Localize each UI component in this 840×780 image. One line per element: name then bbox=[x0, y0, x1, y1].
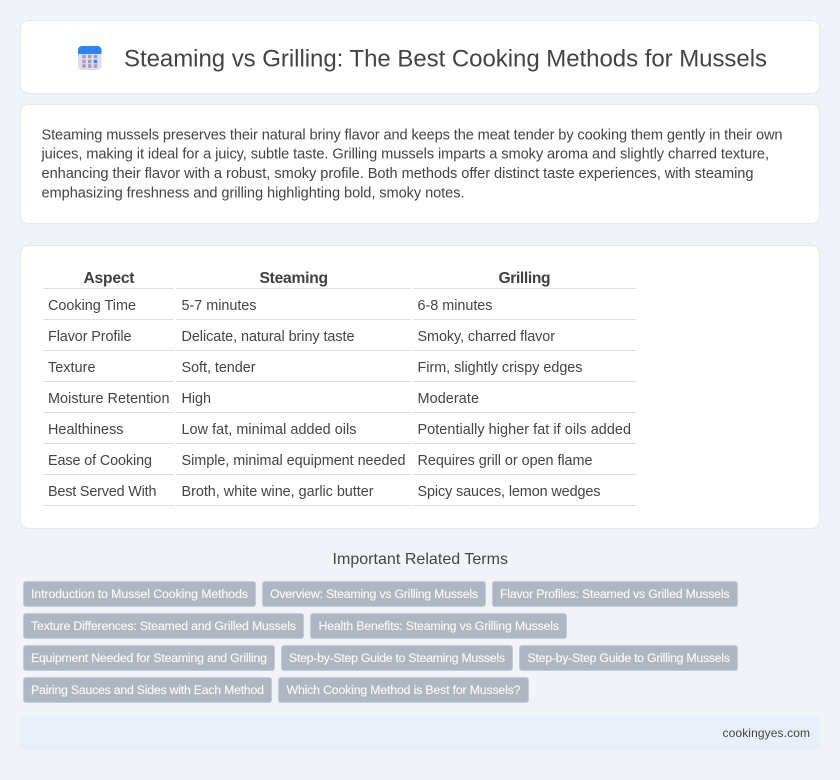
row: best served with: Broth, white wine, garlic butter bbox=[182, 484, 374, 500]
row: best served with: Spicy sauces, lemon wedges bbox=[418, 484, 600, 500]
row: flavor profile: Smoky, charred flavor bbox=[418, 329, 555, 345]
row: moisture retention: Moisture Retention bbox=[48, 391, 170, 407]
row: texture: Soft, tender bbox=[182, 360, 256, 376]
tag: which method bbox=[278, 678, 528, 702]
row: healthiness bbox=[48, 422, 631, 438]
tag: pairing sauces: Pairing Sauces and Sides with Each Method bbox=[31, 683, 264, 697]
tag: equipment: Equipment Needed for Steaming and Grilling bbox=[31, 651, 267, 665]
row: texture bbox=[48, 360, 582, 376]
tag: which method: Which Cooking Method is Best for Mussels? bbox=[286, 683, 521, 697]
tag: introduction bbox=[24, 582, 256, 606]
table header row: Steaming bbox=[260, 270, 328, 287]
footer bbox=[20, 716, 820, 750]
row: best served with: Best Served With bbox=[48, 484, 156, 500]
tag: grilling guide: Step-by-Step Guide to Grilling Mussels bbox=[528, 651, 730, 665]
tag: overview: Overview: Steaming vs Grilling Mussels bbox=[270, 587, 478, 601]
row: moisture retention bbox=[48, 391, 479, 407]
text block: intro paragraph bbox=[40, 128, 782, 202]
row: texture: Firm, slightly crispy edges bbox=[418, 360, 582, 376]
tag: texture differences: Texture Differences: Steamed and Grilled Mussels bbox=[31, 619, 296, 633]
tag: steaming guide: Step-by-Step Guide to Steaming Mussels bbox=[289, 651, 505, 665]
row: flavor profile: Delicate, natural briny taste bbox=[182, 329, 354, 345]
icon: calendar bbox=[78, 46, 102, 70]
tag: steaming guide bbox=[282, 646, 512, 670]
row: cooking time bbox=[48, 298, 492, 314]
footer: cookingyes.com bbox=[722, 726, 810, 740]
title: Steaming vs Grilling: The Best Cooking Methods for Mussels bbox=[124, 46, 767, 72]
row: cooking time: 5-7 minutes bbox=[182, 298, 256, 314]
table header row bbox=[84, 270, 550, 287]
row: flavor profile bbox=[48, 329, 555, 345]
tag: texture differences bbox=[24, 614, 304, 638]
tag: grilling guide bbox=[520, 646, 738, 670]
tag: flavor profiles bbox=[492, 582, 738, 606]
table header row: Aspect bbox=[84, 270, 134, 287]
text block: intro paragraph: Steaming mussels preserves their natural briny flavor and keeps the meat tender by cooking them gently in their own bbox=[42, 128, 782, 144]
row: healthiness: Healthiness bbox=[48, 422, 124, 438]
row: healthiness: Low fat, minimal added oils bbox=[182, 422, 356, 438]
tag: flavor profiles: Flavor Profiles: Steamed vs Grilled Mussels bbox=[500, 587, 730, 601]
tag: equipment bbox=[24, 646, 274, 670]
tag: overview bbox=[262, 582, 486, 606]
panel: comparison table bbox=[20, 246, 820, 528]
row: texture: Texture bbox=[48, 360, 96, 376]
row: healthiness: Potentially higher fat if oils added bbox=[418, 422, 631, 438]
table header row: Grilling bbox=[498, 270, 550, 287]
row: ease of cooking bbox=[48, 453, 592, 469]
text block: intro paragraph: juices, making it ideal for a juicy, subtle taste. Grilling mussels imparts a smoky aroma and slightly charred texture, bbox=[40, 146, 769, 162]
tag: introduction: Introduction to Mussel Cooking Methods bbox=[31, 587, 248, 601]
row: ease of cooking: Requires grill or open flame bbox=[418, 453, 592, 469]
tag: health benefits: Health Benefits: Steaming vs Grilling Mussels bbox=[318, 619, 559, 633]
row: best served with bbox=[48, 484, 600, 500]
tag: pairing sauces bbox=[24, 678, 272, 702]
row: flavor profile: Flavor Profile bbox=[48, 329, 132, 345]
row: moisture retention: Moderate bbox=[418, 391, 479, 407]
heading: important related terms: Important Related Terms bbox=[332, 551, 508, 568]
row: moisture retention: High bbox=[182, 391, 211, 407]
row: ease of cooking: Simple, minimal equipment needed bbox=[182, 453, 406, 469]
panel: related term tags bbox=[24, 582, 738, 702]
panel: introduction bbox=[20, 104, 820, 224]
row: cooking time: Cooking Time bbox=[48, 298, 136, 314]
row: ease of cooking: Ease of Cooking bbox=[48, 453, 152, 469]
text block: intro paragraph: emphasizing freshness and grilling highlighting bold, smoky notes. bbox=[42, 186, 464, 202]
panel: header bbox=[20, 20, 820, 94]
row: cooking time: 6-8 minutes bbox=[418, 298, 492, 314]
tag: health benefits bbox=[310, 614, 566, 638]
text block: intro paragraph: enhancing their flavor with a robust, smoky profile. Both methods offer distinct taste experiences, with steaming bbox=[42, 166, 754, 182]
